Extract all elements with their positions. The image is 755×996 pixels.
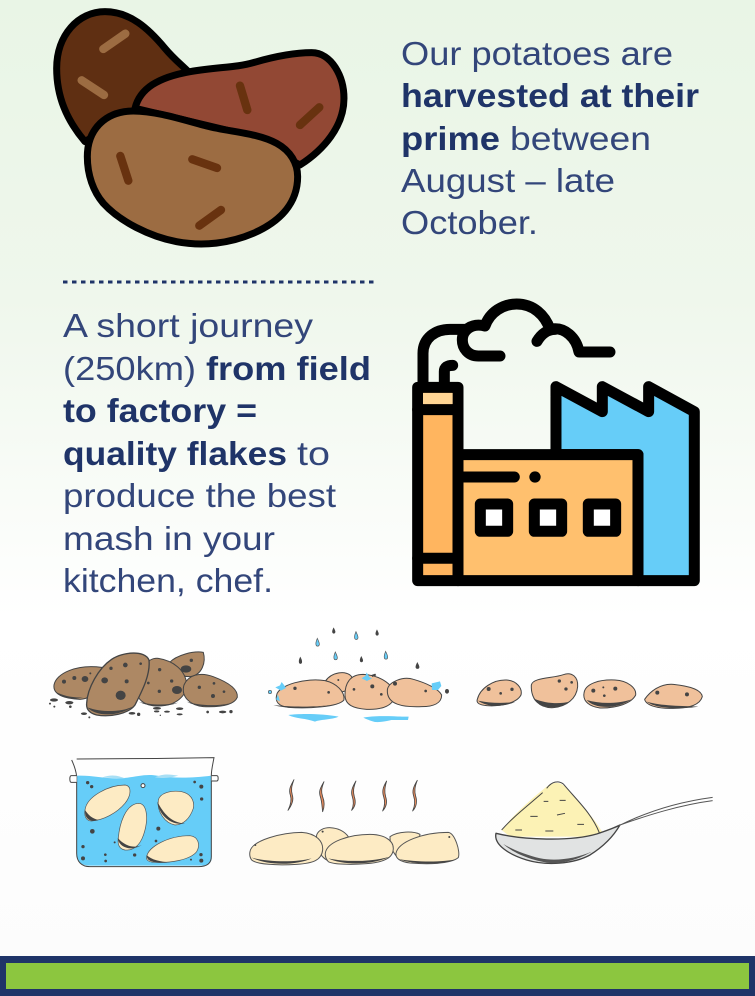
illustration: washed potatoes with water drops [268, 627, 402, 722]
text: harvest period: October. [401, 204, 538, 241]
text: short journey: mash in your [63, 520, 275, 557]
dotted divider [63, 280, 378, 284]
illustration: spoon of potato flakes [496, 782, 713, 863]
text: harvest period: between [510, 120, 651, 157]
text: short journey [63, 307, 371, 599]
text: harvest period: August – late [401, 162, 615, 199]
icon: three potatoes [57, 12, 344, 244]
illustration: steamed potatoes [250, 780, 459, 865]
illustration: potatoes boiling in a pot [70, 758, 218, 867]
text: short journey: kitchen, chef. [63, 562, 273, 599]
text: harvest period: prime [401, 120, 500, 157]
text: harvest period: Our potatoes are [401, 35, 673, 72]
text: short journey: quality flakes [63, 435, 287, 472]
illustration: peeled potatoes row [477, 674, 702, 708]
text: harvest period [401, 35, 699, 241]
illustration: harvested potatoes with soil [49, 652, 237, 718]
text: short journey: produce the best [63, 477, 336, 514]
text: short journey: to [297, 435, 330, 472]
text: short journey: A short journey [63, 307, 314, 344]
text: harvest period: harvested at their [401, 77, 699, 114]
text: short journey: from field [206, 350, 371, 387]
footer bar [0, 956, 755, 996]
illustration: washed potato and splash, right end [387, 662, 449, 720]
text: short journey: (250km) [63, 350, 196, 387]
icon: factory [418, 304, 694, 581]
text: short journey: to factory = [63, 392, 257, 429]
